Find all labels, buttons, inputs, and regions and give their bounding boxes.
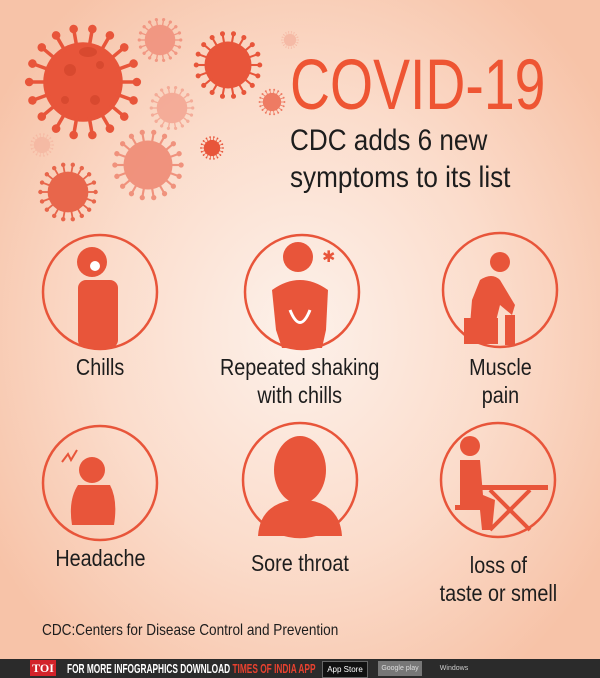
label: muscle pain: Muscle	[469, 354, 531, 380]
icon: muscle pain	[464, 252, 515, 345]
subtitle: symptoms to its list	[290, 161, 510, 194]
icons	[42, 232, 558, 542]
icon: shaking: ✱	[322, 249, 335, 266]
logo: TOI: TOI	[32, 661, 54, 675]
subtitle	[290, 124, 510, 194]
label: chills: Chills	[76, 354, 124, 380]
footer bar: Google play	[381, 665, 419, 672]
icon: chills	[77, 247, 118, 348]
footer text: FOR MORE INFOGRAPHICS DOWNLOAD TIMES OF INDIA APP	[67, 661, 316, 676]
viruses decoration	[24, 18, 299, 222]
label: shaking	[220, 354, 380, 408]
label: shaking: Repeated shaking	[220, 354, 380, 380]
icon: loss of taste	[455, 436, 548, 530]
label: loss of taste	[439, 552, 557, 606]
icon: headache	[62, 450, 115, 525]
label: headache: Headache	[55, 545, 145, 571]
label: loss of taste: taste or smell	[439, 580, 557, 606]
icon: sore throat	[258, 436, 342, 536]
footer bar: Windows	[440, 665, 468, 672]
subtitle: CDC adds 6 new	[290, 124, 487, 157]
label: muscle pain: pain	[481, 382, 519, 408]
label: muscle pain	[469, 354, 531, 408]
footer bar	[0, 659, 600, 678]
store badges: App Store	[327, 665, 363, 674]
store badges	[322, 661, 368, 678]
icon: shaking	[272, 242, 335, 348]
label: loss of taste: loss of	[469, 552, 527, 578]
footnote: CDC:Centers for Disease Control and Prevention	[42, 622, 338, 639]
title: COVID-19	[290, 46, 545, 125]
label: shaking: with chills	[258, 382, 342, 408]
label: sore throat: Sore throat	[251, 550, 349, 576]
